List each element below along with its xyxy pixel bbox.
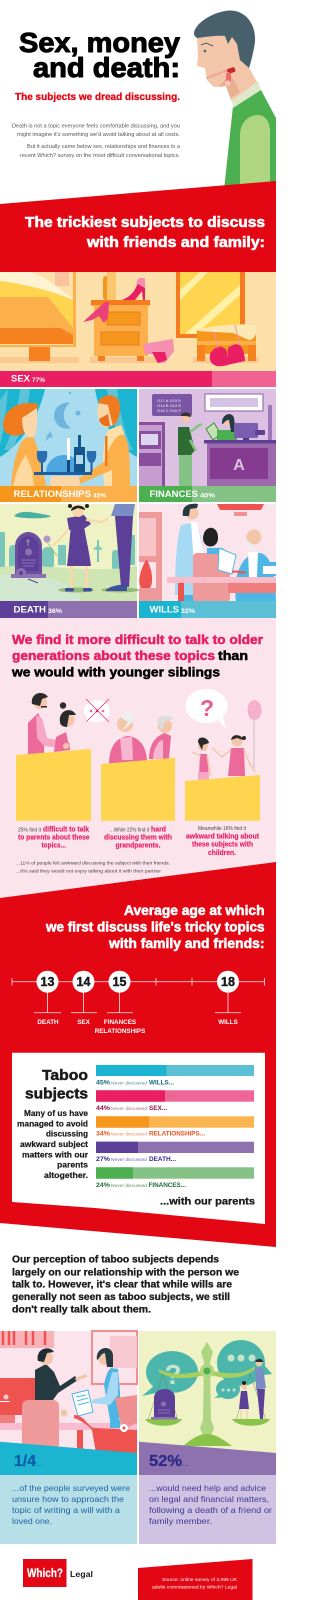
illustration: bank: O17 A O15 D [157,398,181,403]
description: altogether. [44,1171,88,1180]
bar: sex: Never discussed [111,1106,147,1111]
stat description: ...would need help and advice [149,1483,266,1493]
paragraph: perception [12,1255,240,1315]
bar: wills: 45% [96,1080,111,1086]
footnotes: ...11% of people felt awkward discussing the subject with their friends. [16,861,170,867]
note: with our parents: ...with our parents [160,1197,255,1208]
illustration: solicitor meeting [139,504,276,602]
footnotes: ...8% said they would not enjoy talking about it with their partner [16,868,161,874]
intro text: But it actually came below sex, relationships and finances in a [27,144,181,150]
heading: than [218,649,248,663]
section: older generations [0,618,276,898]
label bar: 45% [93,494,107,500]
paragraph: perception: Our perception of taboo subjects depends [12,1255,219,1266]
paragraph: perception: generally not seen as taboo subjects, we still [12,1292,230,1303]
bar: finances: Never discussed [111,1183,147,1188]
title [19,27,180,83]
heading [25,1067,88,1103]
label bar: RELATIONSHIPS [14,489,91,500]
caption: parents: 25% find it [18,828,42,834]
illustration: bank: O18 C O16 F [157,408,181,413]
bar: death: DEATH... [149,1157,176,1163]
bar: finances [96,1167,254,1189]
caption: children: these subjects with [192,842,253,849]
subtitle: The subjects we dread discussing. [15,91,180,103]
description: awkward subject [20,1140,88,1149]
bar: relationships [96,1116,254,1138]
speech bubble question: ? [200,695,214,721]
bar: wills: WILLS... [149,1080,174,1086]
bar: sex: 44% [96,1106,111,1112]
heading: we first discuss life's tricky topics [45,920,264,935]
panel: sex [0,272,276,387]
panel: one in four [0,1331,137,1544]
heading: Average age at which [124,903,264,918]
stat description: family member. [149,1516,212,1526]
illustration: man with zipped mouth [194,11,276,190]
title: Sex, money [19,27,180,58]
bar: sex: SEX... [149,1106,167,1112]
intro text: Death is not a topic everyone feels comfortable discussing, and you [12,124,180,130]
paragraph: perception: talk to. However, it's clear that while wills are [12,1280,233,1291]
bar: finances: 24% [96,1183,111,1189]
timeline [12,971,264,1035]
timeline: 14 [77,975,90,989]
timeline: 15 [113,975,126,989]
description: parents [57,1161,89,1170]
bar: sex [96,1090,254,1112]
footer: source [138,1559,252,1600]
illustration: candlelit dinner [0,389,137,487]
heading [11,633,263,680]
stat description [139,1475,276,1544]
panel: taboo subjects [12,1053,265,1224]
stat description: following a death of a friend or [149,1505,272,1515]
label bar: WILLS [150,605,179,616]
caption: grandparents: ...While 22% find it [110,828,150,834]
heading: The trickiest subjects to discuss [25,214,265,231]
stat band [139,1442,276,1475]
caption: parents [18,827,90,850]
bar: death [96,1142,254,1163]
footer: source: adults commissioned by Which? Legal [152,1584,237,1590]
panel: relationships [0,389,137,502]
speech bubble question [186,689,228,729]
stat description: on legal and financial matters, [149,1494,269,1504]
figures: parents [28,693,76,755]
label bar [139,486,276,502]
caption: children: children. [208,850,236,857]
illustration: will writing meeting [0,1331,137,1454]
heading [25,214,265,251]
label bar: 32% [181,609,196,615]
bar: wills: Never discussed [111,1080,147,1085]
header section [12,11,276,190]
footnotes [16,861,170,874]
bar chart: yellow bars [16,749,260,821]
stat band: ... [182,1461,189,1468]
caption: parents: to parents about these [18,835,90,842]
bar: relationships: Never discussed [111,1132,147,1137]
heading [45,903,264,951]
timeline: WILLS [218,1019,238,1026]
timeline: FINANCES [104,1019,136,1026]
label bar: SEX [11,374,31,385]
panel: death [0,504,139,618]
bar: relationships: RELATIONSHIPS... [149,1132,205,1138]
illustration: graveyard [0,504,139,602]
caption: parents: topics... [42,843,66,850]
paragraph: perception: don't really talk about them. [12,1304,151,1315]
speech bubble crossed out [84,699,110,724]
label bar: 40% [200,494,216,500]
heading: we would with younger siblings [11,666,220,680]
illustration: bank: A [233,457,245,474]
stat description: ...of the people surveyed were [12,1483,130,1493]
stat description [0,1475,137,1544]
footer: logo [23,1559,93,1587]
heading: with friends and family: [86,234,265,251]
heading: with family and friends: [108,936,264,951]
stat band: 52% [149,1453,182,1470]
label bar [0,486,137,502]
stat band: 1/4 [14,1453,36,1470]
bar: finances: FINANCES... [148,1183,186,1189]
description [17,1109,89,1180]
caption: children: Meanwhile 16% find it [198,826,247,832]
label bar: DEATH [14,605,46,616]
stat description: unsure how to approach the [12,1494,124,1504]
caption: grandparents: discussing them with [104,835,172,842]
stat band [0,1442,137,1475]
heading: subjects [25,1086,88,1103]
heading: Taboo [42,1067,88,1084]
footer: logo: Which? [27,1566,63,1580]
timeline: DEATH [37,1019,59,1026]
red band: trickiest subjects [0,181,276,273]
illustration: bank: O14 B O13 E [157,403,181,408]
figures: grandparents [109,713,174,764]
bar: relationships: 34% [96,1132,111,1138]
intro text [12,124,181,159]
title: and death: [33,52,180,83]
label bar [139,601,276,618]
timeline: 13 [41,975,54,989]
heading: generations about these topics [12,649,215,663]
panel: 52 percent [139,1331,276,1544]
intro text: recent Which? survey on the most difficult conversational topics. [20,153,180,159]
heading: We find it more difficult to talk to older [12,633,263,647]
footer: source: Source: online survey of 2,095 UK [162,1577,238,1583]
panel: finances [139,389,276,502]
timeline: RELATIONSHIPS [95,1028,145,1035]
label bar: 77% [32,378,46,384]
stat band: ... [36,1461,43,1468]
label bar [0,371,276,387]
illustration: scales: ? [164,1359,182,1390]
description: Many of us have [24,1109,89,1118]
timeline: SEX [77,1019,91,1026]
description: matters with our [22,1150,88,1159]
panel: wills [139,504,276,618]
bar: wills [96,1065,254,1086]
description: managed to avoid [17,1119,88,1128]
stat description: loved one. [12,1516,52,1526]
section: average age [0,862,276,1247]
stat description: topic of writing a will with a [12,1505,120,1515]
illustration: bedroom [0,272,259,366]
label bar [0,601,137,618]
description: discussing [46,1130,88,1139]
bar: death: 27% [96,1157,111,1163]
label bar: 36% [48,609,63,615]
intro text: might imagine it's something we'd avoid talking about at all costs. [17,132,180,138]
caption: parents: difficult to talk [43,827,89,834]
caption: grandparents: grandparents. [116,843,161,850]
caption: grandparents [104,827,172,850]
paragraph: perception: largely on our relationship with the person we [12,1267,240,1278]
caption: grandparents: hard [151,827,166,834]
timeline: 18 [221,975,235,989]
footer: logo: Legal [70,1570,93,1579]
illustration: scales [142,1340,272,1446]
label bar: FINANCES [150,489,198,500]
caption: children [186,826,260,857]
figures: children and balloon [192,700,262,780]
bar: death: Never discussed [111,1157,147,1162]
caption: children: awkward talking about [186,834,260,841]
illustration: bank [139,394,276,487]
